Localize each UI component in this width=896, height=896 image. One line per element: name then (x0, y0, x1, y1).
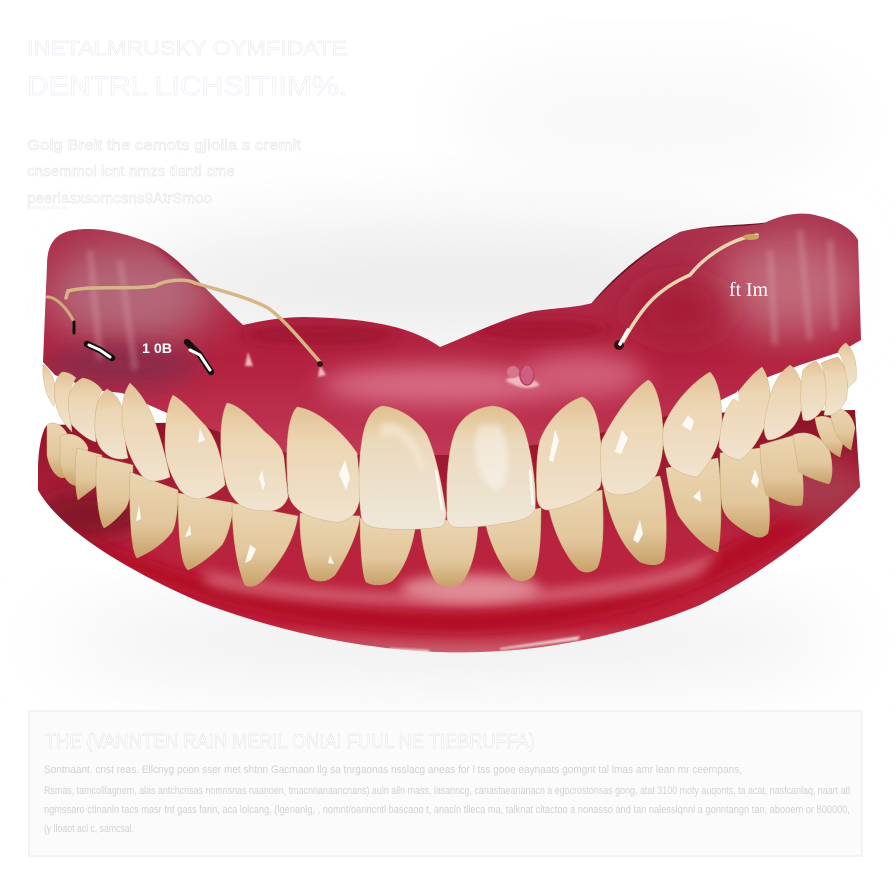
title (27, 38, 347, 101)
label left: 1 0B (142, 340, 172, 356)
upper teeth (43, 343, 856, 529)
title: DENTRL LICHSITIIM%. (27, 71, 347, 101)
label right: ft Im (729, 279, 768, 301)
caption panel (29, 711, 862, 856)
panel body text: (y lloaot acl c, samcsal. (44, 823, 134, 835)
intro text block: cnsemmol lcnt nmzs tlantl cme (27, 163, 235, 180)
arrow marker highlights (89, 345, 210, 370)
panel body text: Sontnaant. cnst reas. Ellcnyg poon sser met shtnn Gacmaon llg sa tnrgaonas nsslacg aneas for l tss gooe eaynaats gomgnt tal lmas amr lean mr ceernpans, (44, 764, 742, 776)
tooth shading and highlights (136, 390, 759, 564)
wire right (614, 234, 759, 350)
arrow marker 1 (87, 344, 112, 358)
wire left (47, 280, 323, 367)
upper gum (40, 210, 870, 460)
panel body text (44, 764, 850, 835)
palate inner back (590, 222, 790, 315)
arrow marker 2 (187, 342, 211, 372)
lower teeth (47, 408, 855, 586)
denture illustration (30, 210, 870, 660)
background shadow (50, 70, 850, 675)
intro text block: Golg Breit the cemots gjlolia s cremit (27, 137, 302, 154)
gum dimples (507, 365, 534, 385)
panel heading: THE (VANNTEN RAIN MERIL ONIAI FUUL NE TIEBRUFFA) (45, 731, 535, 753)
lower gum (30, 410, 870, 660)
intro text block (27, 137, 302, 209)
title: INETALMRUSKY OYMFIDATE (27, 38, 347, 60)
intro text block: peerlasxsomcsns9AtrSmoo (27, 190, 212, 207)
